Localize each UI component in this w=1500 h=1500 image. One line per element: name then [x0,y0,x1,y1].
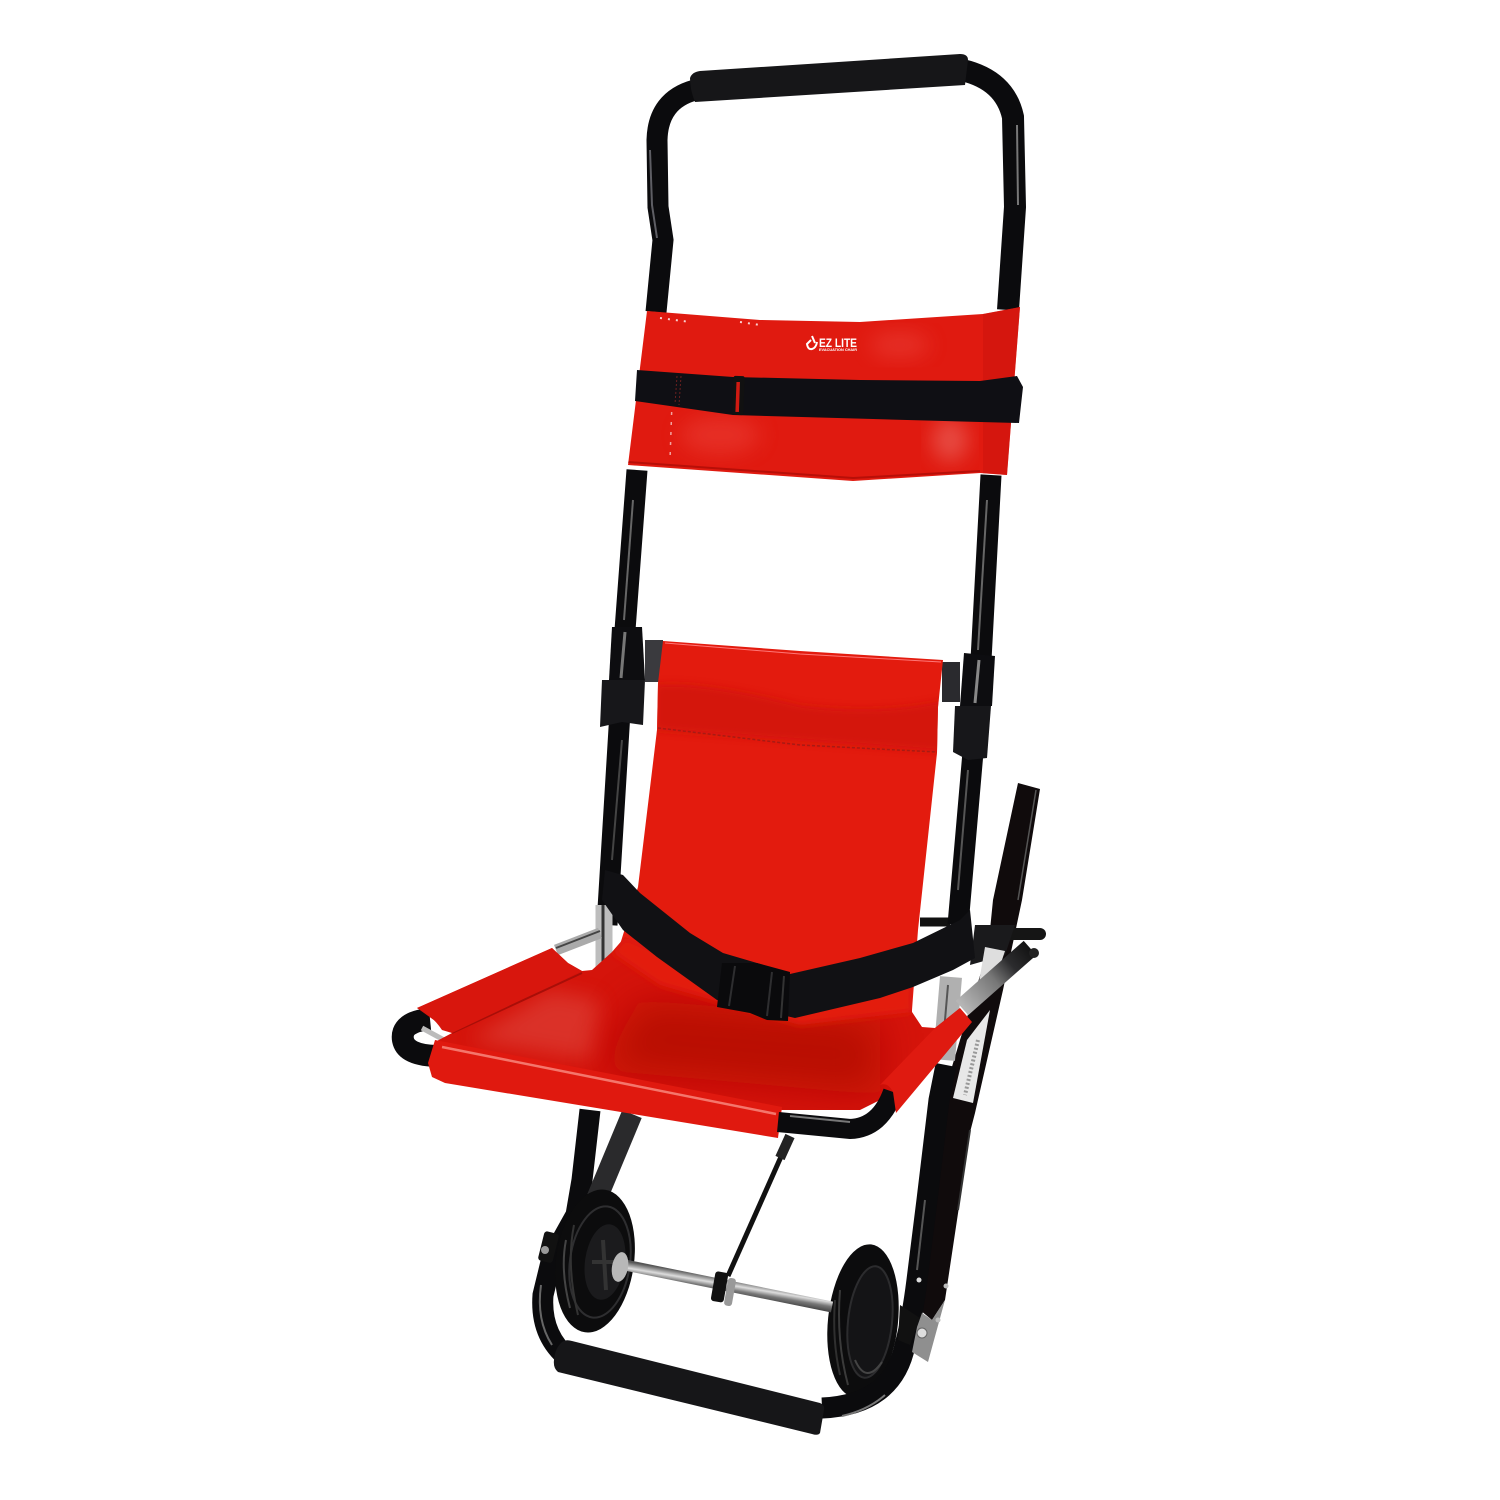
bottom grip [554,1340,824,1435]
logo [807,336,857,352]
right seat fold [880,1008,972,1113]
strut collar [711,1271,736,1306]
logo: EVACUATION CHAIR [819,347,857,352]
top back banner [628,307,1023,481]
seat [417,937,960,1138]
front lower tube [540,1110,632,1358]
logo: EZ LITE [819,338,857,350]
left front tube [403,1019,444,1056]
seat chrome supports [556,905,951,1060]
top handle frame [650,54,1018,312]
chest strap [635,370,1023,423]
right clamp [942,653,995,760]
left clamp [600,627,663,727]
front seat fold [428,1040,782,1138]
warning label lower [953,1010,990,1103]
middle back clamps [600,627,995,760]
axle [610,1251,832,1307]
right wheel [820,1241,906,1401]
seat belt [602,870,975,1021]
wheel bolt [538,1231,559,1263]
bracket plate [898,1284,948,1362]
handle grip [690,54,968,102]
belt buckle [717,963,790,1021]
evacuation chair product image [392,54,1046,1435]
right front tube [778,1092,893,1129]
left upright [607,470,637,925]
warning label upper [978,947,1005,990]
right upright [958,475,991,925]
angled strut [597,1114,632,1198]
strap buckle [732,376,745,415]
left seat fold [417,948,582,1033]
left wheel [538,1184,644,1338]
right seat arm [962,948,1039,1008]
rear lower tube [822,1065,946,1416]
seat back panel [612,641,945,1010]
cross bar [920,922,1040,965]
gas strut [728,1136,790,1276]
rear folding track [920,783,1040,1320]
